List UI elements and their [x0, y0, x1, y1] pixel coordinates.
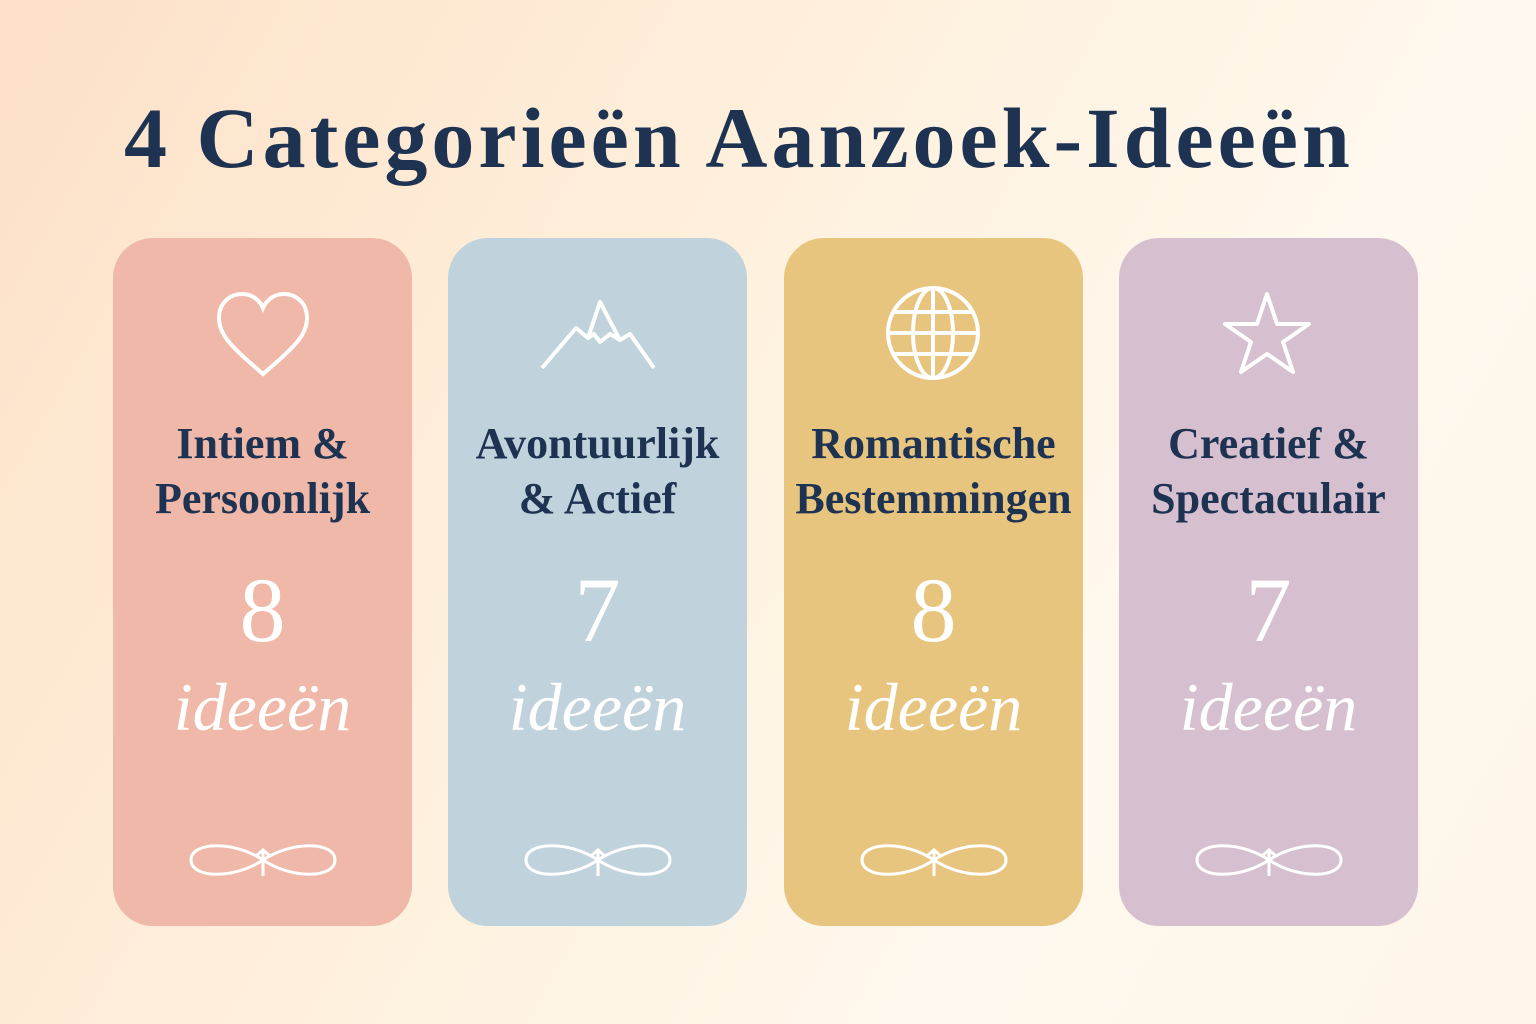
heading: Bestemmingen	[795, 474, 1072, 523]
heading	[476, 419, 720, 523]
heading: Persoonlijk	[155, 474, 370, 523]
heading: Romantische	[811, 419, 1056, 468]
heading: Spectaculair	[1151, 474, 1386, 523]
title: 4 Categorieën Aanzoek-Ideeën	[124, 90, 1354, 186]
icon: star	[1223, 292, 1311, 374]
ornament	[1196, 844, 1342, 876]
number: 8	[910, 559, 956, 661]
label: ideeën	[845, 669, 1022, 745]
panel: avontuurlijk	[448, 238, 747, 926]
label: ideeën	[1180, 669, 1357, 745]
number: 7	[574, 559, 620, 661]
ornament	[860, 844, 1008, 876]
panel: romantische	[784, 238, 1083, 926]
heading	[155, 419, 370, 523]
ornament	[190, 844, 336, 876]
heading: Intiem &	[176, 419, 349, 468]
panel: creatief	[1119, 238, 1418, 926]
icon: heart	[217, 292, 309, 376]
number: 8	[240, 559, 286, 661]
icon: globe	[886, 286, 980, 380]
heading: & Actief	[519, 474, 676, 523]
heading	[1151, 419, 1386, 523]
heading	[795, 419, 1072, 523]
number: 7	[1246, 559, 1292, 661]
label: ideeën	[509, 669, 686, 745]
icon: mountains	[540, 300, 656, 369]
ornament	[524, 844, 672, 876]
label: ideeën	[174, 669, 351, 745]
heading: Creatief &	[1168, 419, 1369, 468]
panel: intiem	[113, 238, 412, 926]
heading: Avontuurlijk	[476, 419, 719, 468]
